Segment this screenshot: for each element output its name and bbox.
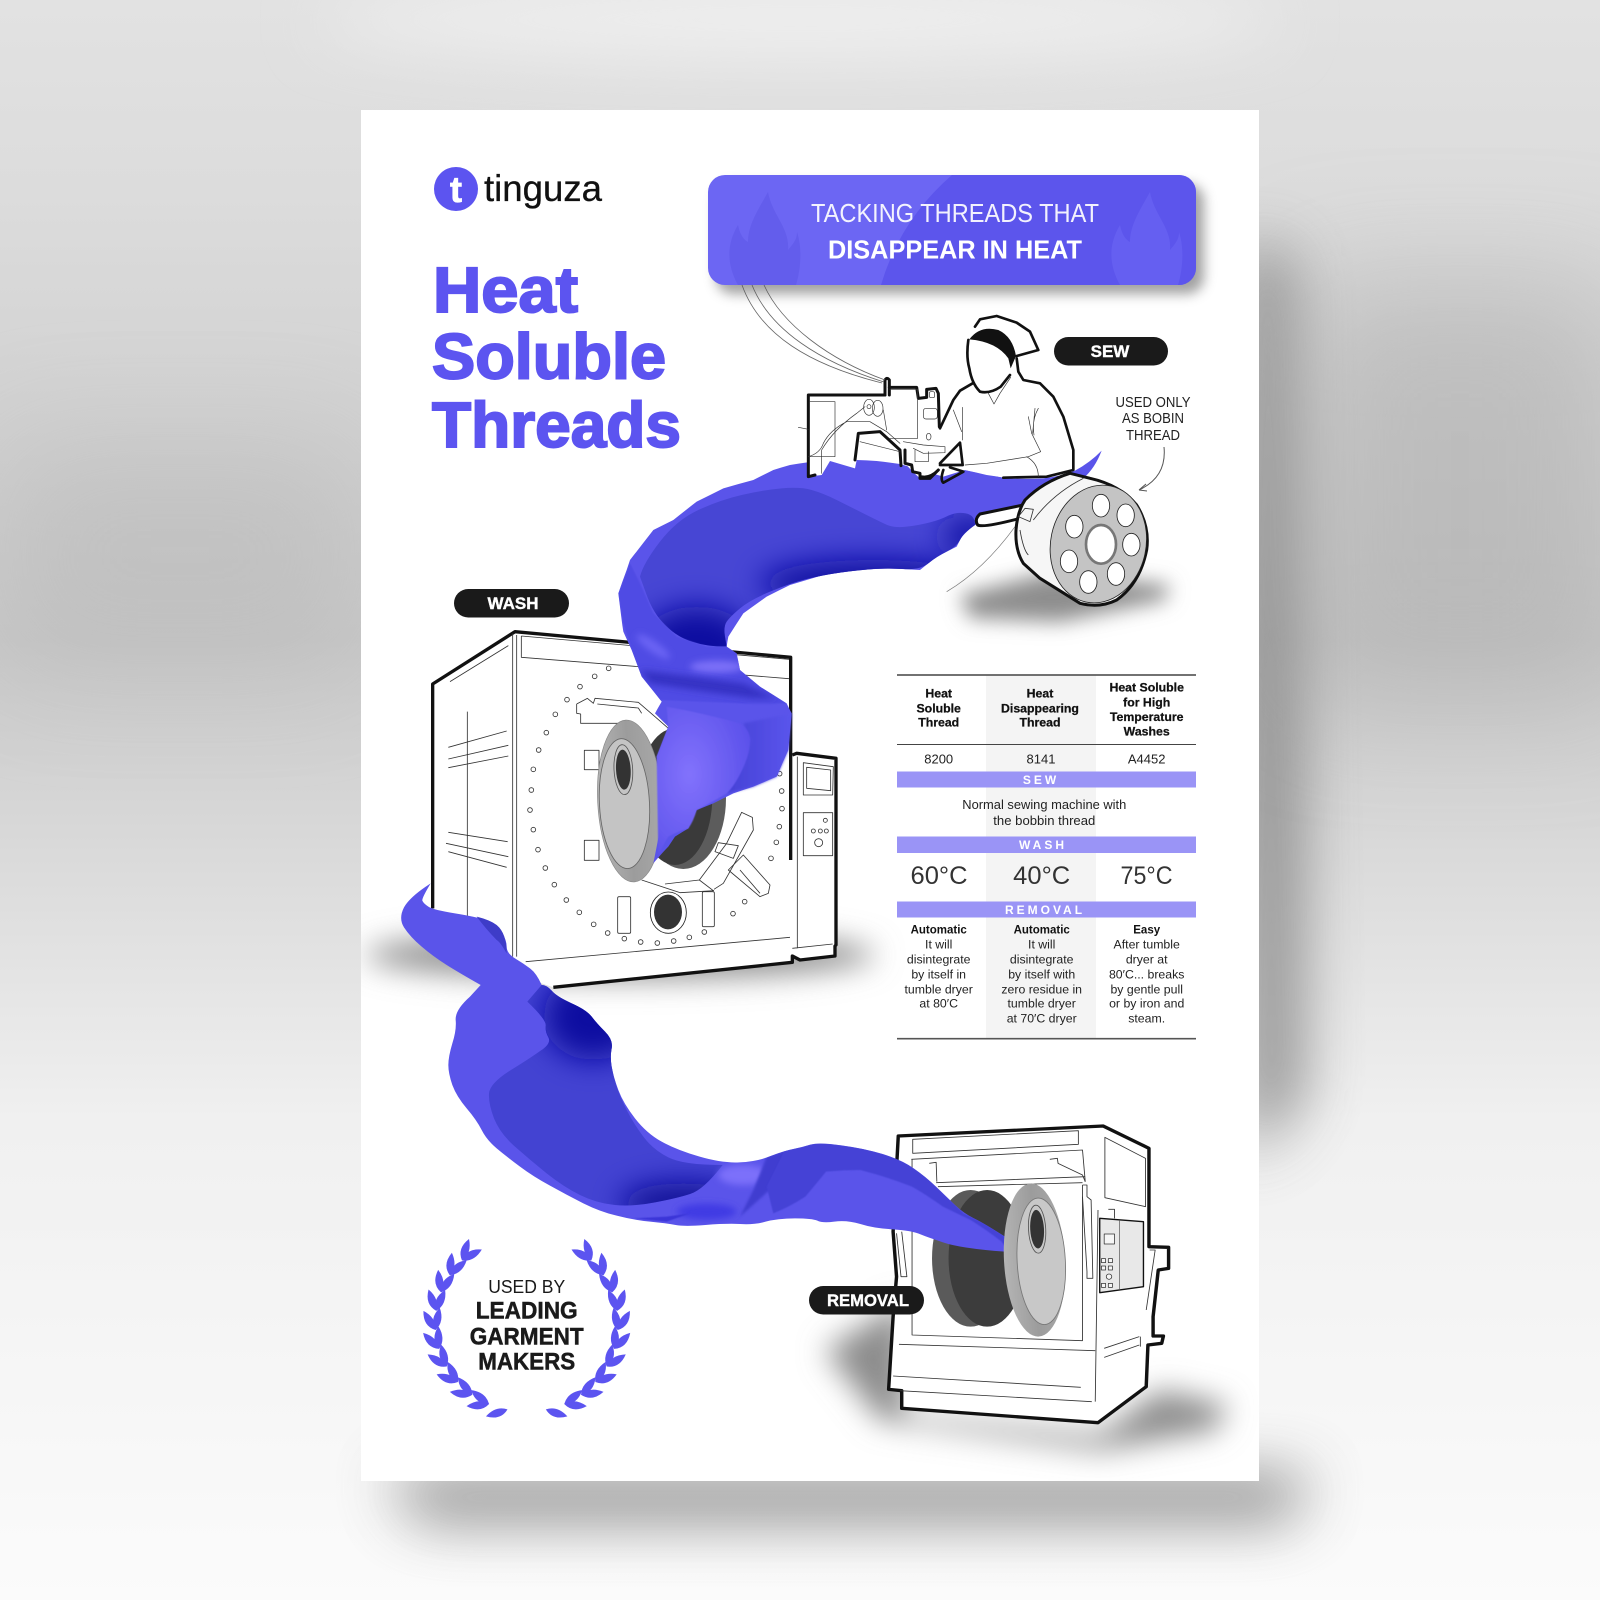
table wash temperatures: 60°C [910, 862, 968, 890]
table wash temperatures: 40°C [1013, 862, 1070, 890]
icon: right flame [1111, 192, 1182, 285]
operator clothing details [953, 377, 1041, 477]
table section bar: wash [897, 836, 1196, 853]
table header row: Washes [1124, 725, 1170, 739]
table removal column two: tumble dryer [1008, 997, 1076, 1011]
banner text: DISAPPEAR IN HEAT [828, 236, 1082, 264]
bobbin body [1016, 473, 1147, 605]
pill: wash: WASH [488, 594, 538, 613]
upper ribbon right fold [727, 713, 792, 793]
logo: t [450, 169, 462, 210]
bobbin handle [976, 505, 1023, 526]
removal dryer illustration [889, 1126, 1169, 1423]
callout: bobbin note [1116, 395, 1191, 491]
main title: Heat [433, 254, 578, 326]
table header row: Heat Soluble [1109, 681, 1184, 695]
table sew description: Normal sewing machine with [962, 797, 1126, 812]
table removal column three: After tumble [1114, 937, 1180, 951]
pill: sew: SEW [1091, 342, 1130, 361]
wash machine lower port [650, 892, 686, 933]
table removal column three: or by iron and [1109, 997, 1184, 1011]
bobbin face [1039, 476, 1157, 612]
pill: removal [809, 1286, 924, 1314]
table header row: Thread [918, 716, 959, 730]
sewing machine thin details [798, 389, 945, 473]
logo [434, 167, 603, 211]
table wash temperatures [910, 862, 1172, 890]
table header row: Heat [1027, 687, 1053, 701]
arrow: callout to bobbin [1139, 447, 1164, 491]
table header row: Heat [925, 687, 952, 701]
table wash temperatures: 75°C [1120, 862, 1172, 890]
wash machine panel lines [446, 633, 833, 962]
banner [708, 175, 1204, 294]
callout: bobbin note: USED ONLY [1116, 395, 1191, 411]
table code row: 8200 [924, 752, 953, 766]
table section bar: wash: WASH [1019, 838, 1067, 852]
operator figure outline [922, 340, 1073, 483]
banner text: TACKING THREADS THAT [811, 200, 1099, 228]
table header row [916, 681, 1184, 739]
table removal column three: dryer at [1126, 952, 1168, 966]
dryer control box [1100, 1218, 1143, 1293]
table removal column three: 80′C... breaks [1109, 967, 1184, 981]
table header row: Thread [1020, 716, 1060, 730]
icon: laurel wreath [420, 1238, 634, 1420]
table removal column one: at 80′C [919, 997, 958, 1011]
table header row: Soluble [916, 702, 961, 716]
table section bar: sew: SEW [1023, 773, 1059, 787]
table removal column two: zero residue in [1001, 982, 1082, 996]
logo: tinguza [484, 168, 603, 209]
wash machine outline [433, 632, 836, 987]
lower ribbon [401, 883, 1005, 1252]
dryer drum [932, 1190, 1026, 1327]
right laurel branch [544, 1238, 634, 1420]
sewing machine outline [808, 378, 939, 478]
dryer outline [889, 1126, 1169, 1423]
poster sheet [361, 110, 1259, 1481]
table removal column one: Automatic [911, 924, 967, 936]
table removal column two: It will [1028, 937, 1055, 951]
laurel badge text [470, 1276, 584, 1375]
table removal column one: disintegrate [907, 952, 971, 966]
table removal column one: tumble dryer [905, 982, 973, 996]
main title: Soluble [432, 320, 666, 392]
table removal column two: Automatic [1014, 924, 1070, 936]
wash machine door [593, 718, 667, 884]
table sew description [962, 797, 1126, 828]
laurel badge text: GARMENT [470, 1324, 584, 1350]
banner text [811, 200, 1099, 264]
laurel badge text: LEADING [476, 1299, 578, 1325]
table sew description: the bobbin thread [993, 813, 1095, 828]
thread lines from banner to machine [742, 285, 885, 383]
upper ribbon twisted folds [618, 563, 787, 703]
table removal column three: steam. [1128, 1012, 1165, 1026]
pill: wash [454, 589, 569, 618]
icon: left flame [729, 192, 800, 285]
laurel badge text: MAKERS [478, 1349, 575, 1375]
laurel badge [420, 1238, 634, 1420]
pill: sew [1054, 337, 1168, 366]
operator cap [975, 316, 1038, 356]
lower ribbon small shade near machine [477, 917, 507, 953]
operator hair [969, 329, 1016, 368]
table code row: A4452 [1128, 752, 1165, 766]
table removal column two: by itself with [1008, 967, 1075, 981]
callout: bobbin note: AS BOBIN [1122, 411, 1184, 427]
table removal column one: by itself in [911, 967, 966, 981]
sewing machine white fills [808, 387, 945, 478]
table section bar: removal: REMOVAL [1005, 903, 1085, 917]
pill: removal: REMOVAL [827, 1291, 909, 1310]
dryer panel lines [893, 1131, 1155, 1402]
shadows under machines [365, 572, 1228, 1450]
bobbin thread [947, 527, 1015, 592]
table code row [924, 752, 1165, 766]
table removal column three: Easy [1133, 924, 1161, 936]
wash machine rivet ring [528, 666, 784, 945]
lower ribbon dark inner surface [489, 985, 722, 1206]
lower ribbon knot folds [633, 1142, 1005, 1247]
main title [432, 254, 681, 461]
upper ribbon [610, 451, 1102, 863]
bobbin illustration [947, 473, 1157, 612]
wash machine illustration [433, 632, 836, 987]
table section bar: sew [897, 772, 1196, 788]
table header row: Temperature [1110, 710, 1184, 724]
bobbin detail lines [1018, 478, 1083, 555]
table header row: for High [1123, 696, 1170, 710]
comparison table [897, 675, 1196, 1039]
table removal column two: disintegrate [1010, 952, 1074, 966]
upper ribbon dark inner surface [640, 488, 975, 646]
main title: Threads [432, 389, 681, 461]
sewing machine and operator [798, 316, 1073, 483]
table removal column one: It will [925, 937, 952, 951]
left laurel branch [420, 1238, 509, 1420]
table removal column two: at 70′C dryer [1007, 1012, 1077, 1026]
table header row: Disappearing [1001, 702, 1079, 716]
table removal column three [1109, 924, 1184, 1026]
table code row: 8141 [1027, 752, 1055, 766]
upper ribbon light core [657, 707, 750, 857]
laurel badge text: USED BY [488, 1276, 565, 1297]
removal dryer door [1000, 1182, 1069, 1338]
table removal column three: by gentle pull [1110, 982, 1183, 996]
operator white fill [940, 316, 1073, 478]
table removal column two [1001, 924, 1082, 1026]
table section bar: removal [897, 902, 1196, 918]
table removal column one [905, 924, 973, 1011]
callout: bobbin note: THREAD [1126, 428, 1180, 444]
wash machine drum [638, 728, 726, 869]
